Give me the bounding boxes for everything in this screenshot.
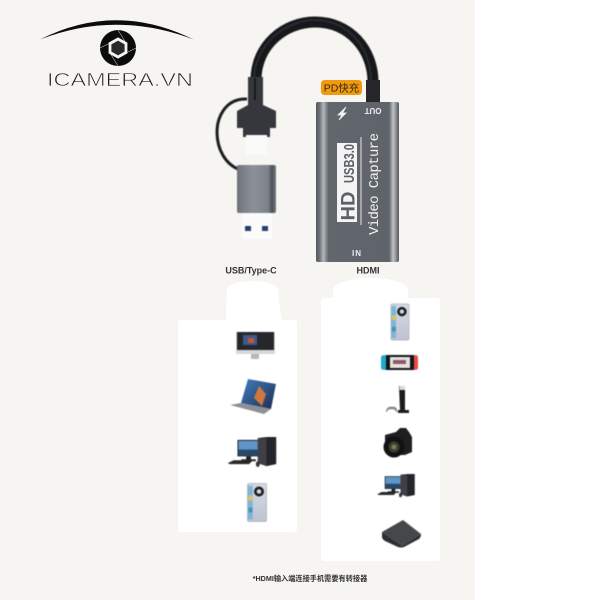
logo wordmark: ICAMERA.VN: [47, 69, 193, 90]
capture card body: [316, 102, 399, 262]
USB-A adapter: [237, 165, 276, 213]
panel: HDMI devices: [321, 298, 440, 561]
lightning icon: [338, 107, 346, 120]
logo lens icon: [100, 30, 136, 66]
icon: iMac: [236, 332, 275, 359]
icon: phone: [248, 484, 266, 522]
loop wire: [217, 99, 247, 169]
HD USB3.0 badge: USB3.0: [341, 144, 358, 183]
icon: desktop PC: [228, 437, 276, 467]
HD USB3.0 badge: HD: [338, 192, 360, 220]
USB-A tip: [242, 213, 272, 239]
footnote: *HDMI输入端连接手机需要有转接器: [253, 574, 368, 583]
Video Capture label: Video Capture: [367, 133, 383, 235]
strain relief: [366, 80, 380, 103]
panel: USB devices: [178, 320, 297, 532]
icon: laptop: [230, 379, 276, 414]
icon: camera: [384, 428, 412, 458]
white blob left: [226, 281, 282, 322]
logo: [40, 20, 194, 90]
icon: game handheld: [381, 355, 418, 370]
USB-C / USB-A connector: [217, 77, 276, 239]
beige backdrop: [0, 0, 475, 600]
OUT label: OUT: [364, 106, 381, 115]
icon: game console: [386, 386, 409, 413]
logo arc: [40, 20, 194, 40]
icon: TV box: [382, 520, 421, 548]
divider line: [360, 137, 362, 225]
connector head: [237, 77, 276, 137]
label USB/Type-C: USB/Type-C: [225, 266, 277, 276]
white blob right: [333, 278, 408, 300]
icon: phone: [391, 304, 409, 340]
icon: desktop PC: [377, 474, 415, 497]
label HDMI: HDMI: [356, 266, 380, 276]
USB-C tip: [246, 135, 267, 155]
PD fast charge badge: [321, 80, 362, 95]
HD USB3.0 badge: [337, 143, 360, 222]
cable: [254, 20, 373, 82]
PD fast charge badge: PD快充: [324, 82, 360, 94]
IN label: IN: [352, 249, 362, 258]
